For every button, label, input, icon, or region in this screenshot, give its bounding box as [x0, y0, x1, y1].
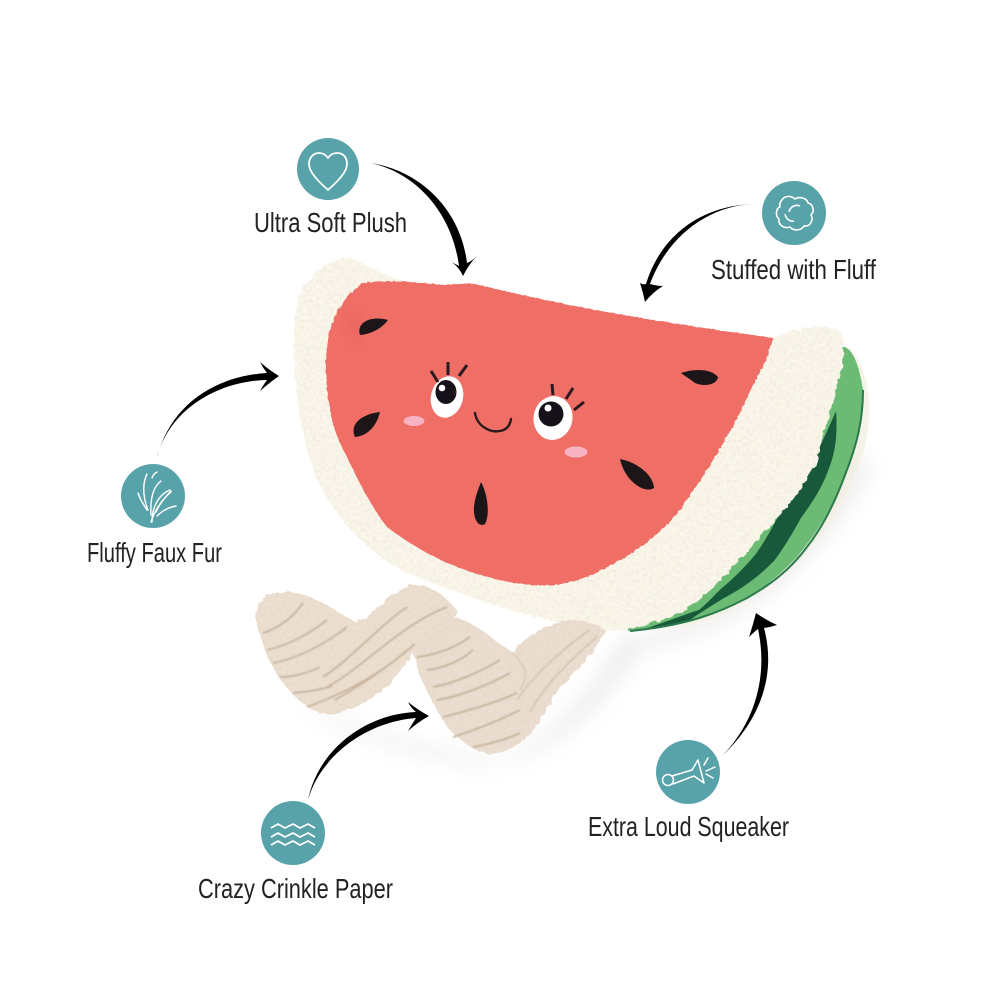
flesh shading [346, 310, 364, 342]
arrow [723, 613, 777, 755]
blush [404, 416, 424, 426]
ground shadow [300, 450, 870, 765]
arrow [640, 204, 755, 302]
icon: fur strands [121, 464, 185, 528]
label: Extra Loud Squeaker [588, 811, 789, 842]
icon: heart [297, 138, 359, 200]
red flesh [326, 281, 773, 585]
right eye [530, 393, 576, 443]
icon: crinkle waves [261, 801, 325, 865]
face [404, 362, 588, 458]
arrow [308, 702, 429, 800]
callout: Ultra Soft Plush [254, 138, 477, 276]
callout: Stuffed with Fluff [640, 181, 876, 302]
icon: cotton fluff [762, 181, 826, 245]
icon: horn [656, 740, 720, 804]
front leg [413, 617, 605, 753]
rind edge line [630, 390, 863, 631]
arrow [157, 362, 279, 458]
cream faux fur rim [294, 258, 844, 631]
label: Stuffed with Fluff [711, 254, 876, 285]
callout: Fluffy Faux Fur [87, 362, 279, 568]
smile [475, 413, 511, 431]
left eye [426, 373, 468, 421]
rind halo [680, 345, 869, 628]
label: Fluffy Faux Fur [87, 537, 222, 568]
callout: Extra Loud Squeaker [588, 613, 789, 842]
green rind [625, 347, 863, 631]
watermelon plush toy [255, 258, 870, 765]
label: Ultra Soft Plush [254, 207, 407, 238]
arrow [370, 163, 477, 276]
label: Crazy Crinkle Paper [198, 873, 393, 904]
dark rind stripe [645, 411, 837, 629]
seeds [354, 318, 718, 525]
callout: Crazy Crinkle Paper [198, 702, 429, 904]
back leg [255, 585, 458, 714]
